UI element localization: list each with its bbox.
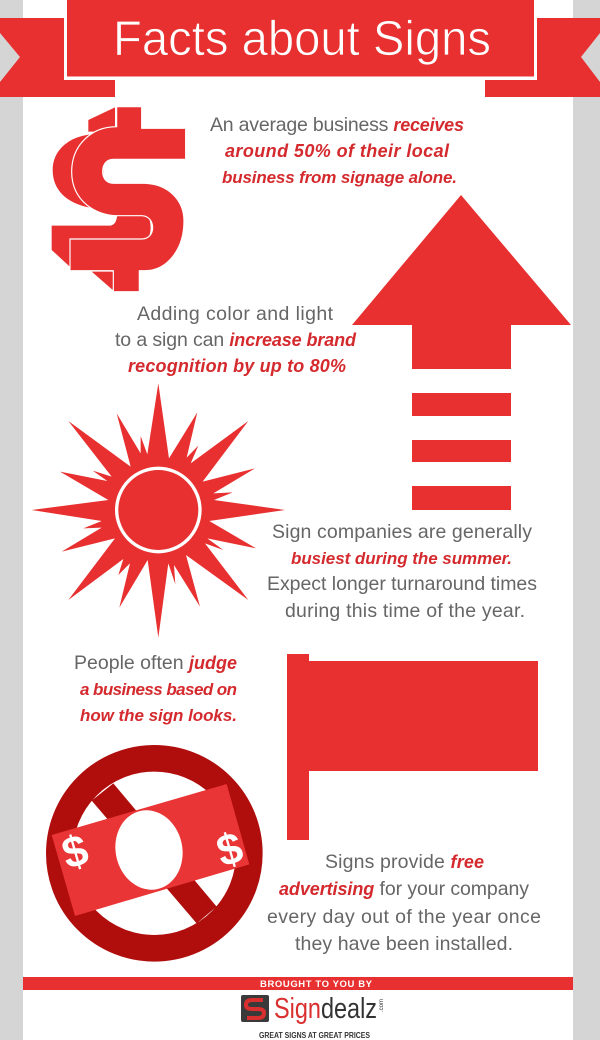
text: local business from signage: around 50% of their local [225,141,450,161]
logo icon [241,995,269,1022]
banknote centre [108,804,190,896]
icon: sun [32,383,285,638]
text: color and light: Adding color and light [137,303,334,325]
icon: up arrow [352,195,571,510]
icon: dollar sign [52,107,186,292]
text: busiest during summer: Sign companies are generally [272,521,532,543]
logo: Signdealz [241,993,385,1040]
logo wordmark: Signdealz [274,993,377,1025]
right dollar glyph: $ [211,823,248,877]
icon: flag [287,654,538,840]
text: color and light [115,303,357,376]
banknote [52,784,249,916]
title: Facts about Signs [113,12,491,66]
text: color and light: recognition by up to 80% [128,356,346,376]
text: local business from signage [210,114,464,187]
left ribbon tail [0,18,115,97]
text: local business from signage: An average business receives [210,114,464,136]
banner main panel [66,0,536,78]
text: free advertising: advertising for your company [279,878,529,900]
text: free advertising [267,851,541,955]
text: busiest during summer [267,521,537,622]
tagline: GREAT SIGNS AT GREAT PRICES [259,1031,371,1040]
text: free advertising: Signs provide free [325,851,484,873]
left dollar glyph: $ [57,825,94,879]
text: free advertising: they have been installed. [295,933,513,955]
title banner [0,0,600,97]
text: judge a business: People often judge [74,652,237,674]
prohibition slash [92,783,217,923]
footer bar [23,977,573,990]
text: judge a business: a business based on [80,680,237,699]
footer caption: BROUGHT TO YOU BY [260,979,373,990]
logo .com: .com [379,999,385,1012]
text: busiest during summer: Expect longer turnaround times [267,573,537,595]
icon: crossed out money [52,758,249,948]
text: judge a business [74,652,237,725]
text: judge a business: how the sign looks. [80,706,237,725]
text: free advertising: every day out of the year once [267,906,541,928]
text: busiest during summer: busiest during the summer. [291,549,512,568]
prohibition ring [59,758,249,948]
text: busiest during summer: during this time of the year. [285,600,525,622]
text: color and light: to a sign can increase brand [115,329,357,351]
text: local business from signage: business from signage alone. [222,168,457,187]
right ribbon tail [485,18,600,97]
